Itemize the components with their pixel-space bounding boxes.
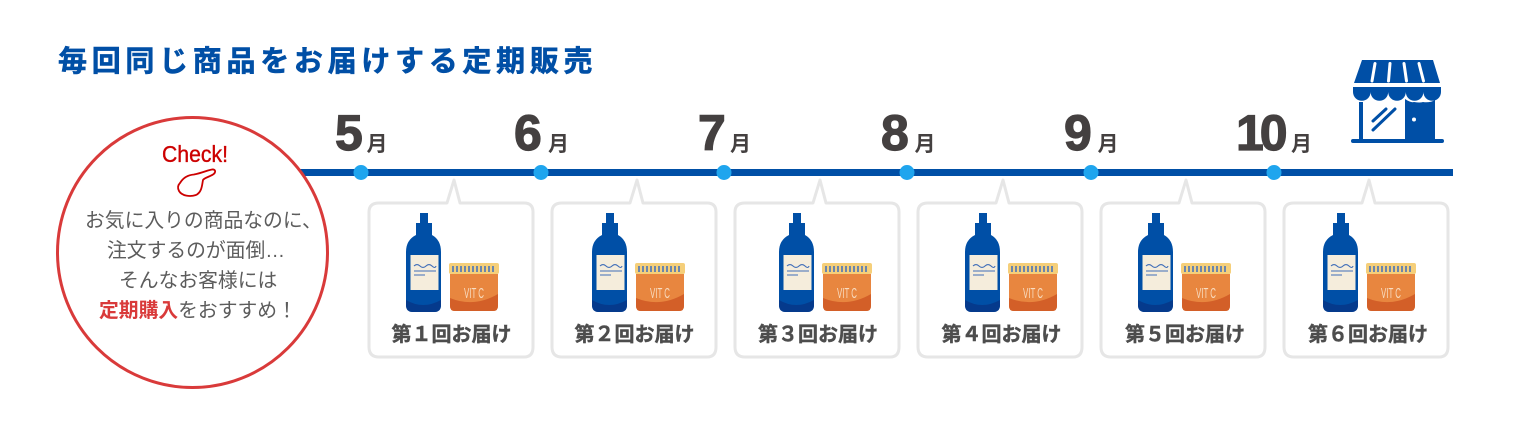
label: 第５回お届け <box>1125 323 1245 346</box>
month: October: 10 <box>1236 105 1286 161</box>
month: May: 月 <box>366 128 388 158</box>
callout box <box>735 180 899 357</box>
callout box <box>918 180 1082 357</box>
month: May <box>335 105 388 161</box>
month: August: 月 <box>914 128 936 158</box>
title: 毎回同じ商品をお届けする定期販売 <box>58 38 597 80</box>
month: October: 月 <box>1291 128 1312 158</box>
products <box>406 213 499 312</box>
label: 第１回お届け <box>392 323 512 346</box>
month: August: 8 <box>881 105 909 161</box>
body text: 定期購入をおすすめ！ <box>99 294 297 323</box>
label: 第３回お届け <box>758 323 878 346</box>
month: May: 5 <box>335 105 363 161</box>
icon: pointing hand <box>178 169 215 196</box>
month: August <box>881 105 936 161</box>
month: July <box>698 105 751 161</box>
icon: store <box>1351 60 1444 143</box>
body text: そんなお客様には <box>119 264 277 293</box>
month: June: 月 <box>548 128 569 158</box>
delivery card 2 <box>552 180 716 357</box>
month: June <box>514 105 569 161</box>
month: September: 月 <box>1098 128 1118 158</box>
products: VIT C <box>1196 285 1216 302</box>
month: June: 6 <box>514 105 542 161</box>
month: September: 9 <box>1064 105 1092 161</box>
products <box>592 213 685 312</box>
products: VIT C <box>464 285 484 302</box>
label: 第６回お届け <box>1308 323 1428 346</box>
check label: Check! <box>162 141 228 167</box>
products: VIT C <box>650 285 670 302</box>
month: October <box>1236 105 1312 161</box>
products: VIT C <box>1023 285 1043 302</box>
callout box <box>1284 180 1448 357</box>
products: VIT C <box>837 285 857 302</box>
delivery card 5 <box>1101 180 1265 357</box>
products <box>779 213 872 312</box>
month: July: 7 <box>698 105 726 161</box>
products <box>965 213 1058 312</box>
delivery card 1 <box>369 180 533 357</box>
label: 第２回お届け <box>574 323 694 346</box>
delivery card 6 <box>1284 180 1448 357</box>
panel: check circle <box>58 118 328 388</box>
body text: お気に入りの商品なのに、 <box>85 204 322 233</box>
delivery card 3 <box>735 180 899 357</box>
month: September <box>1064 105 1118 161</box>
body text: 注文するのが面倒… <box>107 234 285 263</box>
products <box>1323 213 1416 312</box>
callout box <box>369 180 533 357</box>
delivery card 4 <box>918 180 1082 357</box>
products: VIT C <box>1381 285 1401 302</box>
month: July: 月 <box>730 128 751 158</box>
timeline <box>300 165 1453 180</box>
label: 第４回お届け <box>942 323 1062 346</box>
callout box <box>1101 180 1265 357</box>
products <box>1138 213 1231 312</box>
callout box <box>552 180 716 357</box>
body text <box>85 204 322 323</box>
